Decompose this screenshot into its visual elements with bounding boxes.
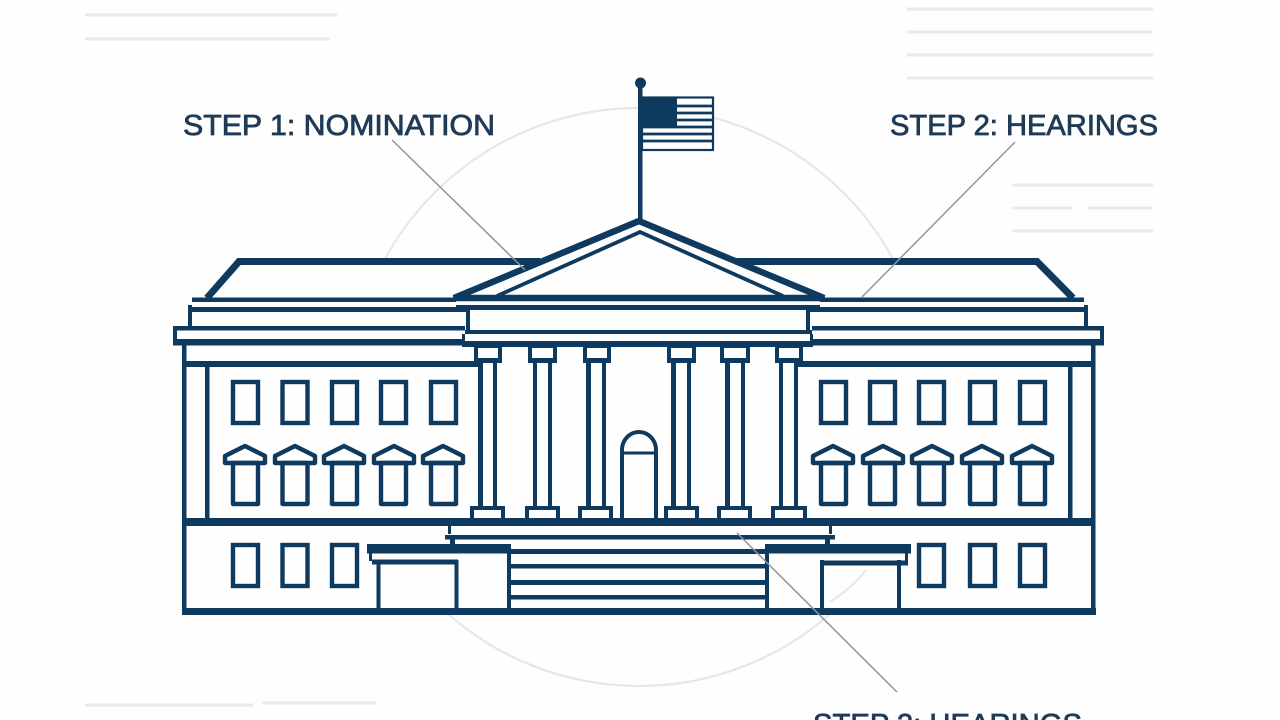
leader line: step 3 xyxy=(737,533,897,692)
background circle xyxy=(350,108,928,686)
ground windows left xyxy=(233,545,357,586)
flag canton xyxy=(642,98,677,126)
columns xyxy=(470,347,807,519)
central entablature xyxy=(455,296,823,347)
door xyxy=(621,432,657,518)
walls xyxy=(182,345,1096,615)
leader line: step 1 xyxy=(392,140,525,270)
flag pole xyxy=(635,78,646,220)
pediment xyxy=(454,221,824,298)
label: step 1: STEP 1: NOMINATION xyxy=(183,110,495,142)
pedimented windows left xyxy=(225,446,463,504)
circle arc fragment in right plinth xyxy=(830,570,866,602)
building xyxy=(173,220,1104,615)
pediment fill xyxy=(456,220,822,298)
leader line: step 2 xyxy=(862,142,1015,297)
flag xyxy=(635,78,713,220)
upper windows left xyxy=(233,382,456,423)
pedimented windows right xyxy=(813,446,1052,504)
building white silhouette xyxy=(173,261,1104,613)
upper windows right xyxy=(821,382,1045,423)
staircase xyxy=(510,549,767,600)
portico platform xyxy=(445,526,835,544)
right stair plinth xyxy=(765,544,911,610)
left stair plinth xyxy=(367,544,511,610)
right roof xyxy=(737,262,1073,298)
flag stripes xyxy=(642,98,713,150)
label: step 2: STEP 2: HEARINGS xyxy=(890,110,1158,142)
left roof xyxy=(207,262,540,298)
ground windows right xyxy=(919,545,1045,586)
right wing cornice xyxy=(797,298,1104,367)
left wing cornice xyxy=(173,298,480,367)
